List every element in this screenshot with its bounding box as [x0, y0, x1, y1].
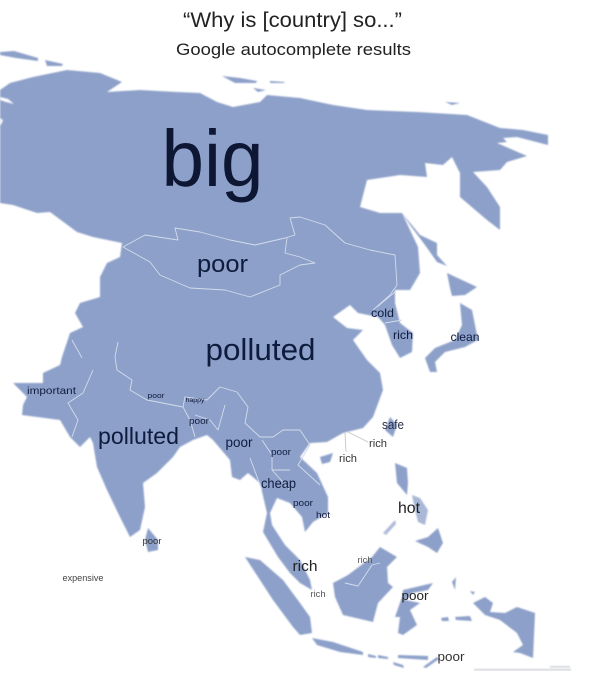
label: Bangladesh poor: poor	[189, 416, 209, 426]
Hainan	[320, 453, 333, 464]
label: Vietnam hot: hot	[316, 510, 331, 520]
label: Indonesia poor: poor	[402, 588, 429, 603]
Hong Kong and Macau pointers	[345, 432, 368, 452]
label: Taiwan safe: safe	[382, 417, 404, 432]
Visayas	[412, 495, 428, 525]
label: Mongolia poor: poor	[197, 251, 248, 278]
label: Cambodia poor: poor	[293, 498, 313, 508]
Borneo	[333, 547, 397, 622]
label: Sri Lanka poor: poor	[142, 536, 162, 546]
Hokkaido	[447, 273, 477, 296]
label: Pakistan important: important	[27, 385, 76, 397]
Japan	[425, 303, 478, 372]
label: East Timor poor: poor	[438, 649, 465, 664]
label: Thailand cheap: cheap	[261, 475, 296, 491]
label: South Korea rich: rich	[393, 328, 413, 342]
label: Nepal poor: poor	[148, 391, 165, 400]
label: India polluted: polluted	[98, 423, 179, 449]
Arctic islands	[0, 51, 460, 105]
attribution scale bar	[474, 666, 571, 670]
China and India Himalayan border	[68, 340, 300, 437]
Mongolia and northeast China border	[123, 217, 397, 310]
title	[176, 9, 411, 59]
label: Macau rich: rich	[339, 453, 357, 465]
Sakhalin strip	[402, 213, 447, 266]
Maluku islands	[441, 577, 475, 621]
Indochina and Bangladesh borders	[183, 405, 320, 490]
label: Myanmar poor: poor	[226, 434, 253, 450]
Sumatra	[245, 557, 312, 635]
label: Russia big: big	[162, 114, 264, 203]
mainland Asia	[0, 70, 548, 590]
Sri Lanka	[145, 528, 158, 552]
label: Malaysia rich: rich	[292, 558, 318, 575]
New Guinea	[473, 597, 535, 658]
label: Hong Kong rich: rich	[369, 438, 387, 450]
label: Laos poor: poor	[271, 447, 291, 457]
white inlet	[0, 97, 14, 125]
label: Bhutan happy: happy	[186, 397, 205, 404]
title line 1: “Why is [country] so...”	[183, 9, 402, 32]
label: Maldives expensive: expensive	[62, 573, 104, 583]
Java	[312, 638, 363, 655]
Taiwan	[385, 417, 397, 437]
subtitle line 2: Google autocomplete results	[176, 40, 411, 59]
label: Singapore rich: rich	[310, 589, 326, 599]
label: North Korea cold: cold	[371, 306, 394, 320]
label: Philippines hot: hot	[398, 500, 421, 517]
Luzon	[395, 463, 408, 495]
label: Japan clean: clean	[450, 330, 480, 344]
Mindanao	[415, 528, 443, 553]
label: Brunei rich: rich	[358, 555, 372, 565]
country borders	[68, 217, 402, 586]
Sulawesi	[395, 583, 433, 635]
Palawan	[383, 520, 396, 535]
label: China polluted: polluted	[206, 332, 316, 367]
country labels	[27, 114, 480, 664]
Borneo and Korea borders	[345, 292, 402, 586]
Lesser Sunda islands	[368, 654, 439, 668]
